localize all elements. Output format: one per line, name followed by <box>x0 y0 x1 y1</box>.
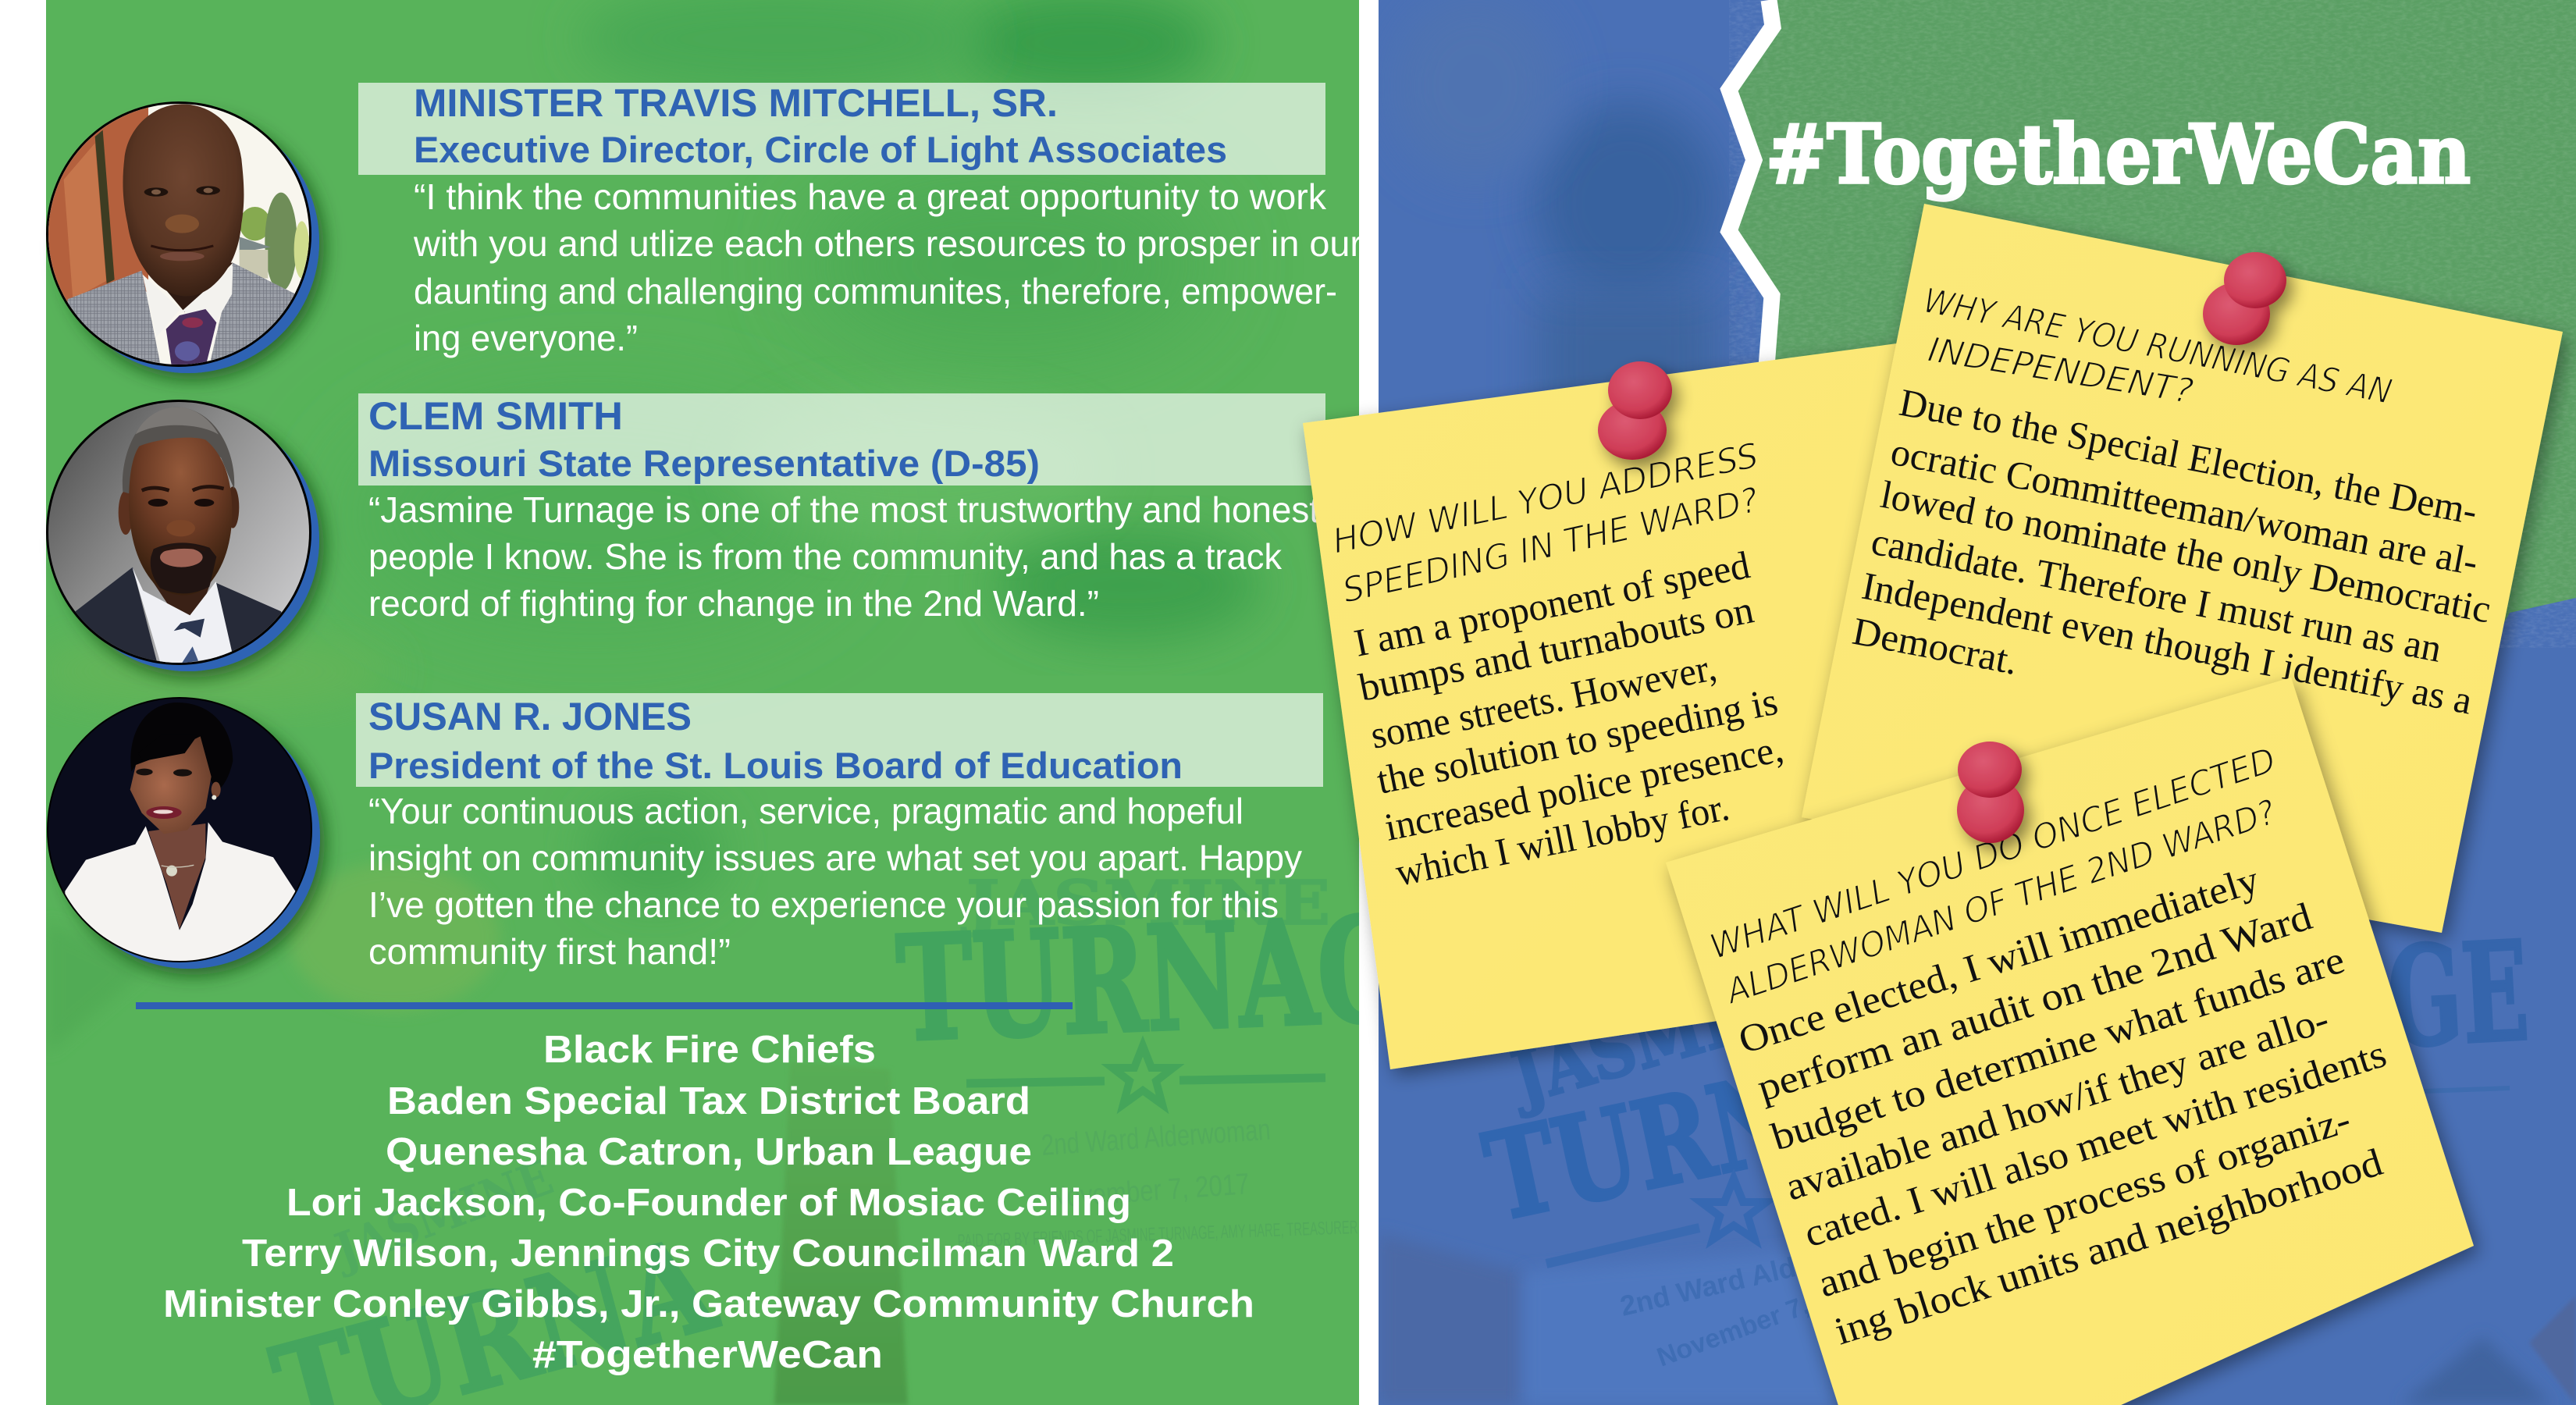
note paper <box>1303 342 1987 1069</box>
note paper <box>1802 204 2563 933</box>
faded yard sign lettering: November 7, 2017 <box>1048 1168 1251 1215</box>
note answer text: I am a proponent of speed <box>1350 542 1753 665</box>
supporters list: Baden Special Tax District Board <box>387 1080 1030 1122</box>
note answer text <box>1733 857 2391 1353</box>
note answer text <box>1350 542 1787 895</box>
note question handwriting: WHAT WILL YOU DO ONCE ELECTED <box>1705 740 2281 967</box>
quote: Susan Jones: community first hand!” <box>368 931 731 972</box>
quote: Susan Jones <box>368 791 1302 972</box>
banner: Clem Smith <box>358 393 1325 486</box>
faded yard sign lettering on blue <box>1474 912 2532 1373</box>
note answer text: and begin the process of organiz- <box>1813 1097 2355 1305</box>
faded yard sign lettering on blue: TURN <box>1474 1044 1809 1249</box>
note answer text: the solution to speeding is <box>1373 679 1781 802</box>
quote: Susan Jones: insight on community issues are what set you apart. Happy <box>368 838 1302 878</box>
note answer text <box>1849 380 2494 723</box>
panel: blue and green pinboard background <box>1379 0 2576 1405</box>
icon: red push pin <box>1598 361 1672 460</box>
note answer text: cated. I will also meet with residents <box>1799 1031 2391 1255</box>
portrait: Travis Mitchell <box>39 94 328 382</box>
panel: green endorsements <box>31 0 1407 1405</box>
note paper <box>1666 678 2474 1405</box>
supporters list: Terry Wilson, Jennings City Councilman Ward 2 <box>242 1232 1174 1275</box>
note answer text: budget to determine what funds are <box>1766 937 2350 1158</box>
green paper area <box>1729 0 2576 648</box>
quote: Clem Smith: “Jasmine Turnage is one of the most trustworthy and honest <box>368 489 1319 530</box>
supporters list: Quenesha Catron, Urban League <box>386 1131 1032 1173</box>
note answer text: ing block units and neighborhood <box>1829 1140 2387 1353</box>
note answer text: lowed to nominate the only Democratic <box>1877 472 2494 631</box>
icon: red push pin <box>2203 252 2286 345</box>
endorsement: Susan Jones <box>39 691 1323 980</box>
quote: Clem Smith <box>368 489 1319 624</box>
torn white edge <box>1729 0 1773 367</box>
supporters list: Black Fire Chiefs <box>543 1029 876 1071</box>
quote: Clem Smith: record of fighting for change in the 2nd Ward.” <box>368 583 1099 624</box>
faded yard sign lettering on blue: November 7, 2017 <box>1653 1268 1875 1373</box>
banner: Susan Jones <box>356 693 1323 787</box>
faded yard sign lettering on blue: 2nd Ward Alderwoman <box>1617 1223 1919 1322</box>
quote: Travis Mitchell <box>413 176 1362 358</box>
quote: Susan Jones: I’ve gotten the chance to experience your passion for this <box>368 884 1279 925</box>
note answer text: perform an audit on the 2nd Ward <box>1752 894 2317 1109</box>
note: speeding question <box>1303 342 1987 1069</box>
note answer text: Democrat. <box>1849 609 2022 683</box>
supporters list: Lori Jackson, Co-Founder of Mosiac Ceiling <box>286 1182 1131 1224</box>
faded yard sign lettering on blue: JASMINE <box>1499 949 1842 1122</box>
divider line <box>136 1002 1073 1009</box>
endorsement: Clem Smith <box>39 390 1325 679</box>
supporters list: Minister Conley Gibbs, Jr., Gateway Community Church <box>163 1283 1254 1325</box>
title: Travis Mitchell: Executive Director, Circle of Light Associates <box>414 129 1227 170</box>
note answer text: increased police presence, <box>1381 726 1787 849</box>
icon: red push pin <box>1957 742 2024 843</box>
name: Clem Smith: CLEM SMITH <box>368 394 623 438</box>
note question handwriting: SPEEDING IN THE WARD? <box>1339 480 1762 611</box>
note: once elected <box>1666 678 2474 1405</box>
portrait: Clem Smith <box>39 390 328 679</box>
banner: Travis Mitchell <box>358 83 1325 175</box>
note question handwriting: ALDERWOMAN OF THE 2ND WARD? <box>1720 792 2281 1012</box>
note question handwriting: HOW WILL YOU ADDRESS <box>1329 436 1762 562</box>
endorsement: Travis Mitchell <box>39 81 1362 382</box>
faded yard sign lettering <box>259 868 1407 1405</box>
faded yard sign lettering: 2nd Ward Alderwoman <box>1041 1114 1272 1162</box>
portrait: Susan Jones <box>39 691 328 980</box>
note answer text: Once elected, I will immediately <box>1733 857 2264 1062</box>
note answer text: bumps and turnabouts on <box>1355 587 1757 710</box>
quote: Travis Mitchell: “I think the communities have a great opportunity to work <box>414 176 1327 217</box>
heading: #TogetherWeCan: #TogetherWeCan <box>1766 106 2471 202</box>
faded yard sign lettering: TURNAG <box>894 885 1407 1074</box>
note answer text: Due to the Special Election, the Dem- <box>1896 380 2481 533</box>
quote: Travis Mitchell: with you and utlize each others resources to prosper in our <box>413 223 1362 264</box>
note answer text: Independent even though I identify as a <box>1859 564 2475 723</box>
note answer text: which I will lobby for. <box>1392 784 1733 895</box>
quote: Travis Mitchell: ing everyone.” <box>414 318 638 358</box>
supporters list: #TogetherWeCan <box>532 1334 883 1376</box>
note: why independent <box>1802 204 2563 933</box>
name: Susan Jones: SUSAN R. JONES <box>368 695 692 738</box>
quote: Susan Jones: “Your continuous action, service, pragmatic and hopeful <box>368 791 1244 831</box>
note answer text: available and how/if they are allo- <box>1780 997 2334 1208</box>
note question handwriting: WHY ARE YOU RUNNING AS AN <box>1920 281 2395 412</box>
supporters list <box>163 1029 1254 1376</box>
quote: Travis Mitchell: daunting and challenging communites, therefore, empower- <box>414 271 1337 311</box>
faded yard sign lettering: JASMINE <box>325 1148 560 1281</box>
note answer text: ocratic Committeeman/woman are al- <box>1888 429 2482 584</box>
note question handwriting: INDEPENDENT? <box>1925 330 2196 412</box>
green panel background photo wash <box>31 0 1407 1405</box>
note answer text: candidate. Therefore I must run as an <box>1868 519 2445 670</box>
title: Clem Smith: Missouri State Representative (D-85) <box>368 443 1040 484</box>
name: Travis Mitchell: MINISTER TRAVIS MITCHELL, SR. <box>414 81 1058 125</box>
note answer text: some streets. However, <box>1367 645 1720 757</box>
faded yard sign lettering: JASMINE <box>961 868 1330 939</box>
faded yard sign lettering: PAID FOR BY FRIENDS OF JASMINE TURNAGE, AMY HARE, TREASURER <box>957 1217 1358 1252</box>
quote: Clem Smith: people I know. She is from the community, and has a track <box>368 536 1283 577</box>
title: Susan Jones: President of the St. Louis Board of Education <box>368 745 1183 786</box>
